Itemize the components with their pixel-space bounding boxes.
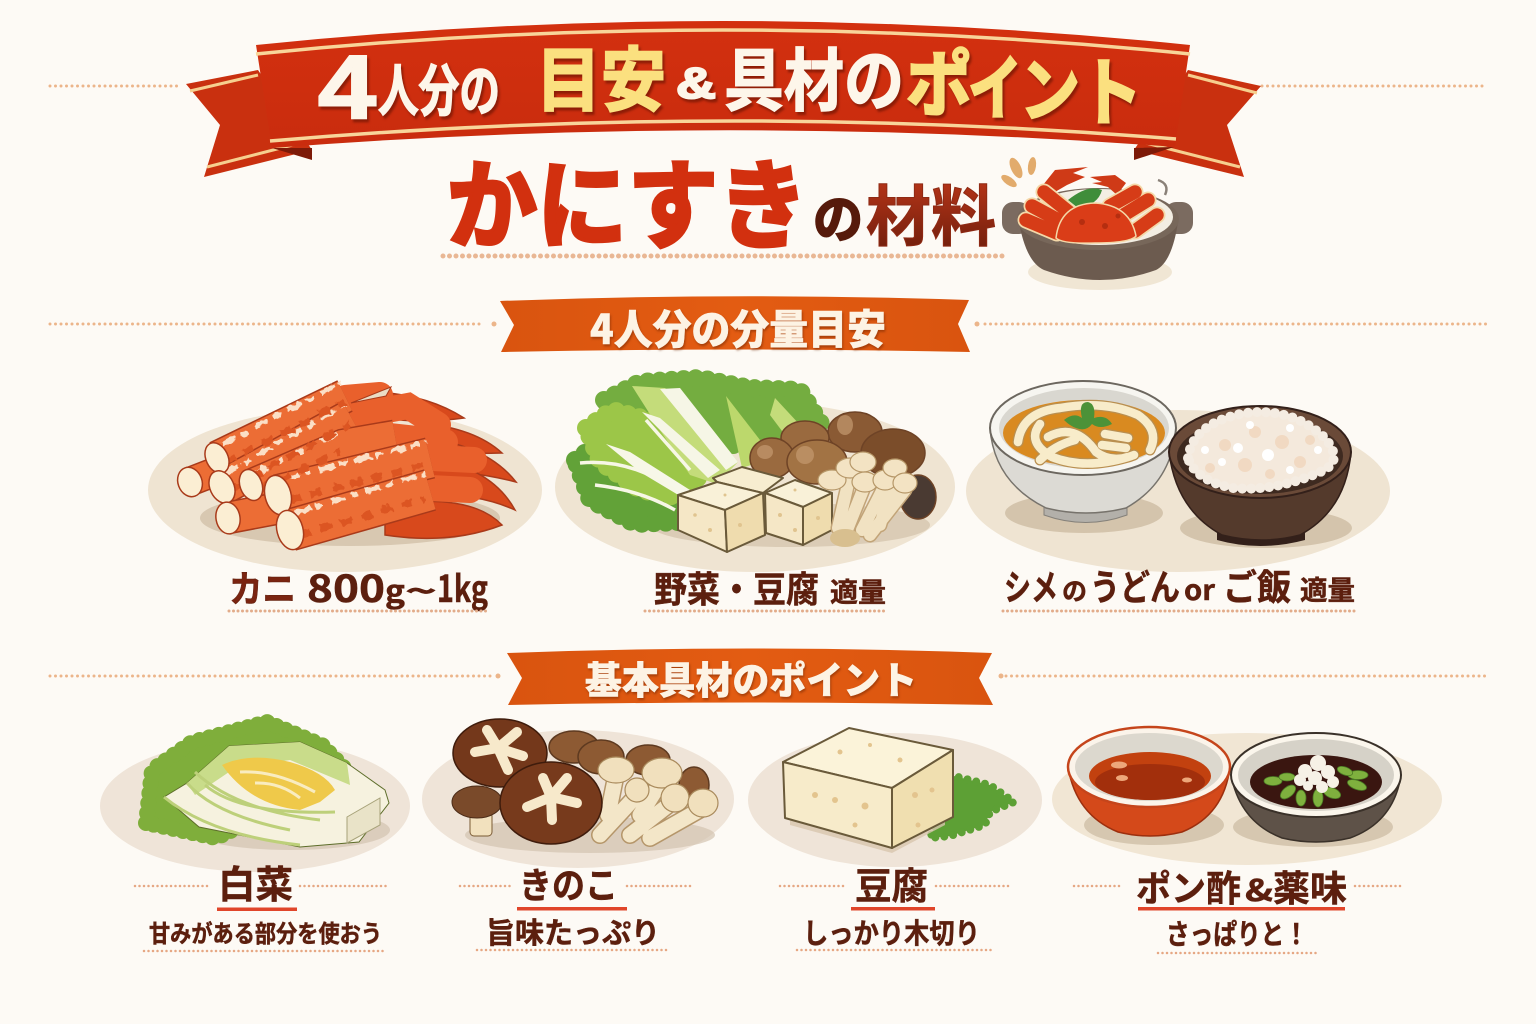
label: ponzu and condiments: & bbox=[1245, 866, 1273, 910]
cabbage leaves bbox=[575, 378, 822, 524]
title text: 人分の bbox=[378, 60, 500, 123]
heading: kanisuki no zairyo: かにすき bbox=[447, 154, 808, 261]
brown shimeji caps bbox=[549, 731, 709, 803]
label: tofu bbox=[780, 856, 1009, 952]
label: crab amount: ~ bbox=[405, 567, 437, 611]
section ribbon: 基本具材のポイント bbox=[496, 648, 1004, 705]
heading: kanisuki no zairyo: の bbox=[813, 192, 863, 250]
plate bbox=[748, 733, 1042, 867]
label: crab amount: カニ bbox=[229, 559, 296, 613]
title text bbox=[318, 38, 1142, 138]
ribbon left tail bbox=[186, 70, 312, 177]
label: udon or rice amount: ご飯 bbox=[1223, 559, 1291, 611]
heading: kanisuki no zairyo: 材料 bbox=[866, 180, 996, 254]
tofu block bbox=[783, 728, 953, 848]
panel: vegetables and tofu bbox=[555, 378, 955, 572]
panel: crab legs bbox=[148, 383, 542, 572]
legs bbox=[189, 396, 430, 530]
title text: & bbox=[676, 59, 716, 108]
yellow heart bbox=[222, 758, 335, 810]
green leaf bbox=[930, 775, 1014, 838]
label: udon or rice amount: の bbox=[1062, 572, 1087, 608]
title text: 目安 bbox=[536, 42, 666, 120]
title text: 4 bbox=[318, 38, 376, 138]
shiitake caps bbox=[750, 412, 936, 519]
label: udon or rice amount: シメ bbox=[1004, 559, 1058, 611]
small shiitake bbox=[470, 812, 492, 836]
rice bbox=[1188, 412, 1334, 489]
label: ponzu and condiments bbox=[1074, 860, 1403, 953]
decorative dotted lines bbox=[50, 86, 1487, 676]
crab plate bbox=[148, 408, 542, 572]
garnish bbox=[1064, 402, 1112, 429]
label: crab amount: 1kg bbox=[437, 559, 488, 613]
pale inner leaves bbox=[632, 386, 738, 484]
shell mottling bbox=[222, 383, 427, 535]
shimeji cream caps bbox=[598, 757, 718, 817]
label: ponzu and condiments: 薬味 bbox=[1273, 860, 1347, 912]
plate bbox=[422, 730, 734, 868]
label: tofu: しっかり木切り bbox=[803, 912, 980, 952]
label: vegetables and tofu amount: 適量 bbox=[830, 571, 886, 610]
label: mushrooms: きのこ bbox=[519, 857, 618, 909]
outer green leaves bbox=[146, 722, 349, 838]
label: vegetables and tofu amount: 野菜・豆腐 bbox=[654, 561, 819, 613]
label: udon or rice amount bbox=[1003, 559, 1358, 611]
ponzu bowl bbox=[1068, 727, 1230, 836]
label: udon or rice amount: うどん bbox=[1090, 559, 1180, 611]
label: crab amount: 800 bbox=[307, 559, 385, 613]
label: udon or rice amount: 適量 bbox=[1300, 569, 1355, 608]
label: napa cabbage: 甘みがある部分を使おう bbox=[149, 914, 382, 949]
shimeji mushrooms bbox=[838, 475, 905, 535]
title text: ポ bbox=[906, 46, 972, 126]
label: crab amount bbox=[229, 559, 488, 613]
title text: ト bbox=[1080, 52, 1142, 135]
leg joints bbox=[345, 395, 474, 490]
title text: ン bbox=[1020, 52, 1080, 130]
label: tofu: 豆腐 bbox=[855, 856, 928, 910]
section ribbon: 4人分の分量目安 bbox=[492, 296, 980, 356]
plate bbox=[966, 410, 1390, 572]
icon: crab hot pot bbox=[999, 156, 1193, 290]
plate bbox=[100, 740, 410, 872]
label: udon or rice amount: or bbox=[1184, 569, 1216, 609]
panel: tofu bbox=[748, 728, 1042, 867]
section ribbon: 4人分の分量目安: 4人分の分量目安 bbox=[590, 296, 886, 356]
udon noodles bbox=[1018, 405, 1153, 464]
title text: イ bbox=[968, 50, 1022, 128]
claw tips bbox=[380, 392, 516, 538]
cut face bbox=[347, 798, 380, 843]
label: mushrooms: 旨味たっぷり bbox=[486, 910, 660, 952]
tofu cubes bbox=[678, 467, 832, 552]
shiitake one bbox=[453, 719, 547, 787]
label: napa cabbage: 白菜 bbox=[218, 854, 293, 909]
rice bowl bbox=[1169, 406, 1351, 546]
label: napa cabbage bbox=[135, 854, 387, 951]
panel: ponzu and condiments bbox=[1052, 727, 1442, 865]
ribbon main band bbox=[256, 21, 1190, 148]
plate bbox=[555, 402, 955, 572]
section ribbon: 基本具材のポイント: 基本具材のポイント bbox=[585, 650, 917, 705]
plate bbox=[1052, 733, 1442, 865]
label: ponzu and condiments: さっぱりと！ bbox=[1166, 913, 1308, 953]
shiitake two bbox=[500, 762, 602, 844]
sauce bowl bbox=[1231, 733, 1401, 842]
udon bowl bbox=[990, 381, 1176, 522]
panel: napa cabbage bbox=[100, 722, 410, 872]
panel: udon and rice bbox=[966, 381, 1390, 572]
cut ends bbox=[174, 439, 308, 553]
ribbon folds bbox=[272, 147, 1174, 160]
grated daikon bbox=[1294, 755, 1339, 793]
cut cabbage bbox=[164, 742, 389, 847]
title ribbon bbox=[186, 21, 1261, 177]
title text: 具材の bbox=[724, 44, 904, 120]
label: crab amount: g bbox=[385, 567, 405, 611]
shimeji stems bbox=[600, 775, 703, 838]
label: ponzu and condiments: ポン酢 bbox=[1136, 860, 1241, 912]
label: mushrooms bbox=[460, 857, 693, 952]
panel: mushrooms bbox=[422, 719, 734, 868]
green onion bbox=[1264, 765, 1368, 807]
ribbon right tail bbox=[1134, 70, 1261, 177]
